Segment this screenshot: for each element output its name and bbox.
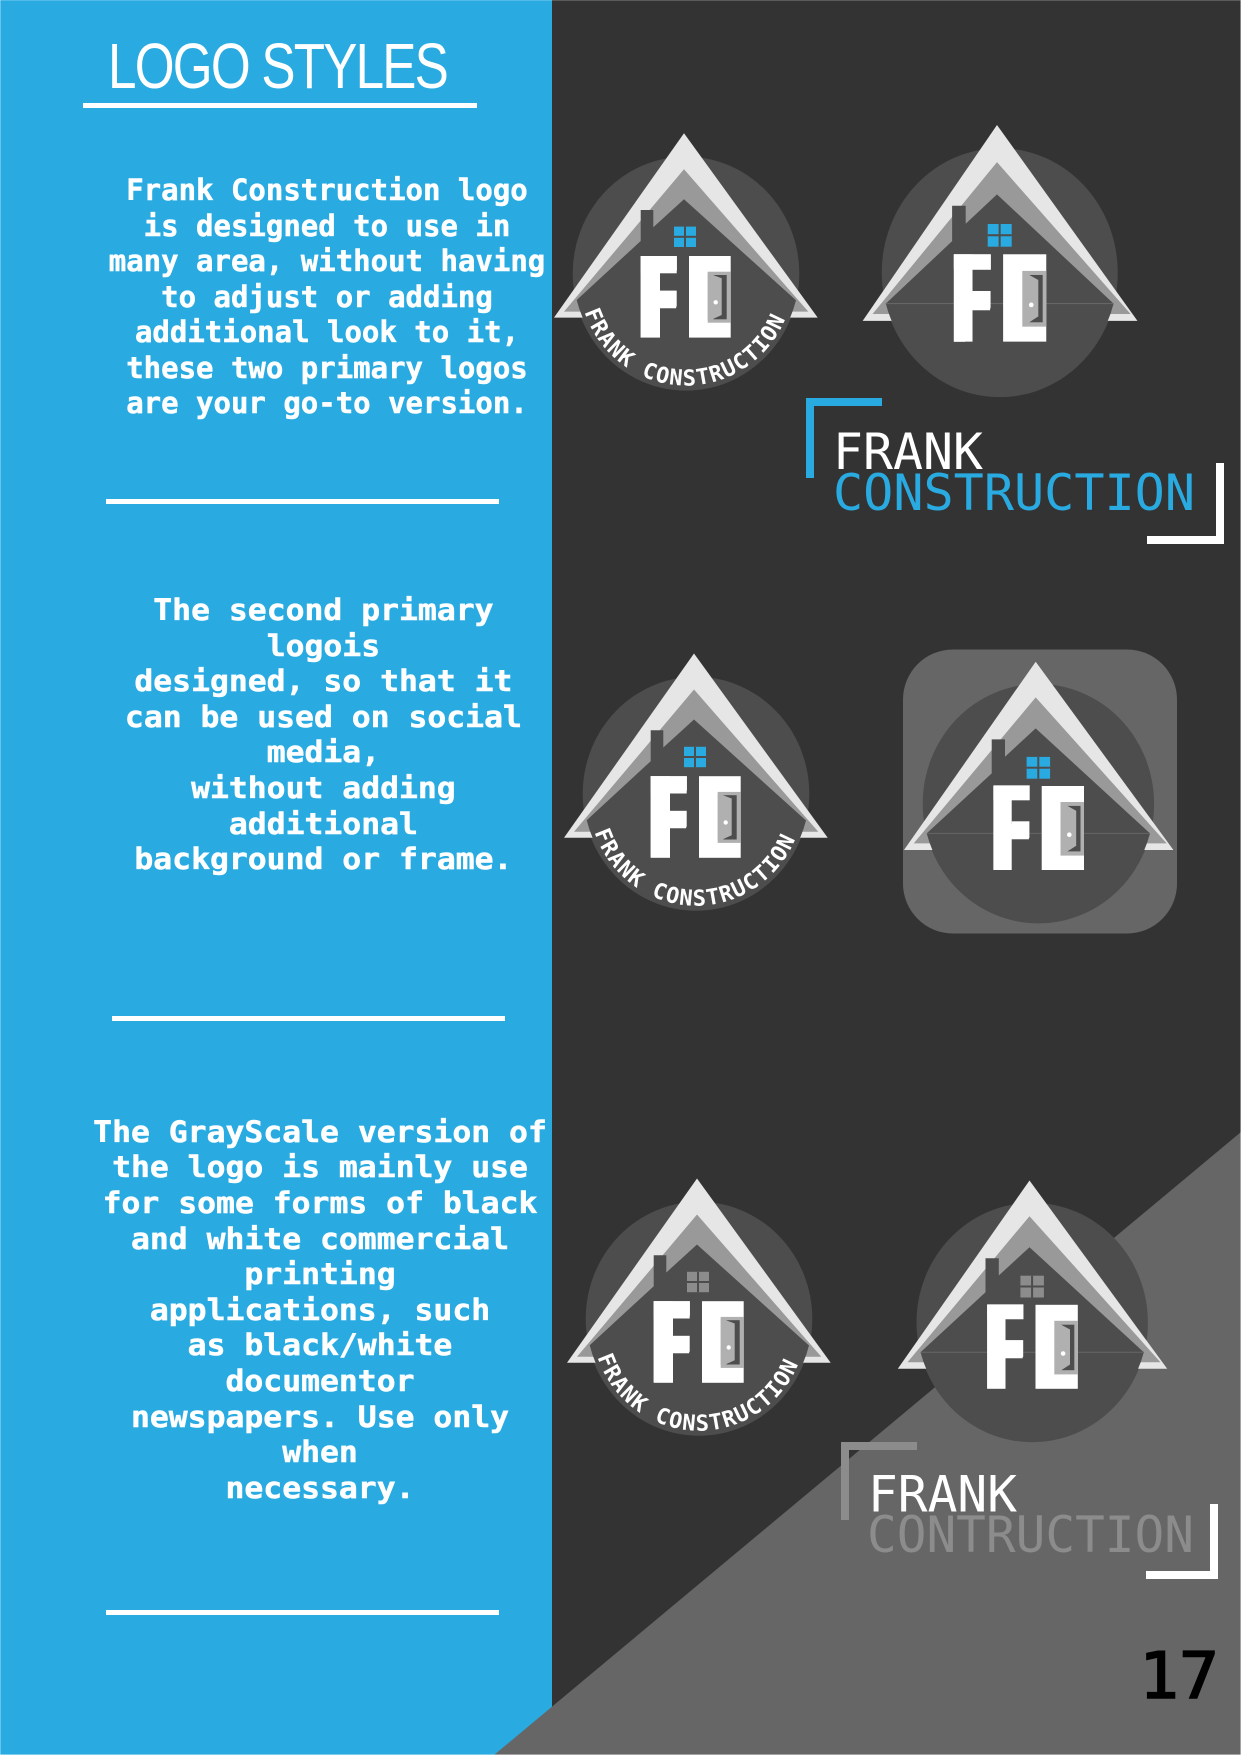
house emblem: F	[989, 760, 1032, 895]
wordmark: grayscale	[841, 1442, 1218, 1579]
logo: primary with arc text: FRANK CONSTRUCTION	[585, 308, 785, 386]
wordmark: blue and white	[806, 398, 1224, 544]
divider three	[106, 1610, 499, 1615]
text block: second primary logo: can be used on social	[125, 701, 522, 735]
grey corner triangle	[494, 1132, 1241, 1755]
logo: primary without text	[863, 125, 1137, 397]
text block: primary logos: to adjust or adding	[161, 280, 493, 314]
text block: second primary logo: additional	[229, 808, 418, 842]
text block: grayscale version: for some forms of black	[103, 1187, 537, 1221]
logo: grayscale without text	[898, 1180, 1167, 1442]
text block: primary logos: are your go-to version.	[126, 386, 528, 420]
text block: primary logos: many area, without having	[109, 244, 545, 278]
frank word: FRANK	[833, 423, 983, 481]
white corner bracket	[1147, 463, 1224, 544]
white corner bracket	[1146, 1504, 1218, 1579]
frank word: FRANK	[868, 1466, 1017, 1524]
logo: social media app icon	[903, 650, 1177, 934]
contruction word: CONTRUCTION	[867, 1506, 1194, 1564]
text block: second primary logo: background or frame.	[134, 843, 512, 877]
logo: primary with arc text	[554, 133, 818, 390]
title: LOGO STYLES	[108, 32, 447, 102]
title underline	[83, 103, 477, 108]
text block: grayscale version: when	[282, 1436, 358, 1470]
blue text panel	[0, 0, 552, 1755]
text block: primary logos	[109, 173, 545, 420]
text block: second primary logo	[125, 594, 522, 877]
text block: second primary logo: The second primary	[153, 594, 494, 628]
text block: second primary logo: logois	[267, 630, 380, 664]
text block: grayscale version: necessary.	[225, 1472, 415, 1506]
logo: second primary with arc text: F	[646, 753, 689, 882]
text block: grayscale version: newspapers. Use only	[131, 1401, 509, 1435]
text block: grayscale version: the logo is mainly use	[112, 1151, 528, 1185]
text block: primary logos: is designed to use in	[144, 209, 510, 243]
text block: grayscale version: as black/white	[188, 1329, 452, 1363]
logo: grayscale with arc text	[567, 1178, 831, 1436]
blue corner bracket	[806, 398, 882, 478]
logo: second primary with arc text	[564, 654, 828, 911]
text block: primary logos: additional look to it,	[135, 315, 519, 349]
divider two	[112, 1016, 505, 1021]
page number: 17	[1139, 1640, 1219, 1714]
text block: primary logos: these two primary logos	[126, 351, 528, 385]
text block: second primary logo: designed, so that it	[134, 665, 512, 699]
construction word: CONSTRUCTION	[833, 464, 1195, 522]
text block: grayscale version: The GrayScale version of	[93, 1116, 547, 1150]
text block: primary logos: Frank Construction logo	[126, 173, 528, 207]
logo: grayscale with arc text: FRANK CONSTRUCTION	[598, 1352, 798, 1431]
house emblem	[904, 662, 1173, 923]
logo: primary without text: F	[950, 229, 993, 368]
logo: primary with arc text: F	[636, 233, 679, 362]
text block: second primary logo: media,	[267, 736, 380, 770]
rounded square background	[903, 650, 1177, 934]
grey corner bracket	[841, 1442, 917, 1520]
divider one	[106, 499, 499, 504]
text block: grayscale version: documentor	[225, 1365, 415, 1399]
text block: grayscale version: applications, such	[150, 1294, 490, 1328]
logo: second primary with arc text: FRANK CONSTRUCTION	[595, 828, 795, 906]
logo: grayscale without text: F	[983, 1279, 1026, 1414]
text block: grayscale version: printing	[244, 1258, 396, 1292]
text block: grayscale version	[93, 1116, 547, 1506]
text block: grayscale version: and white commercial	[131, 1223, 509, 1257]
logo: grayscale with arc text: F	[650, 1278, 692, 1407]
text block: second primary logo: without adding	[191, 772, 456, 806]
